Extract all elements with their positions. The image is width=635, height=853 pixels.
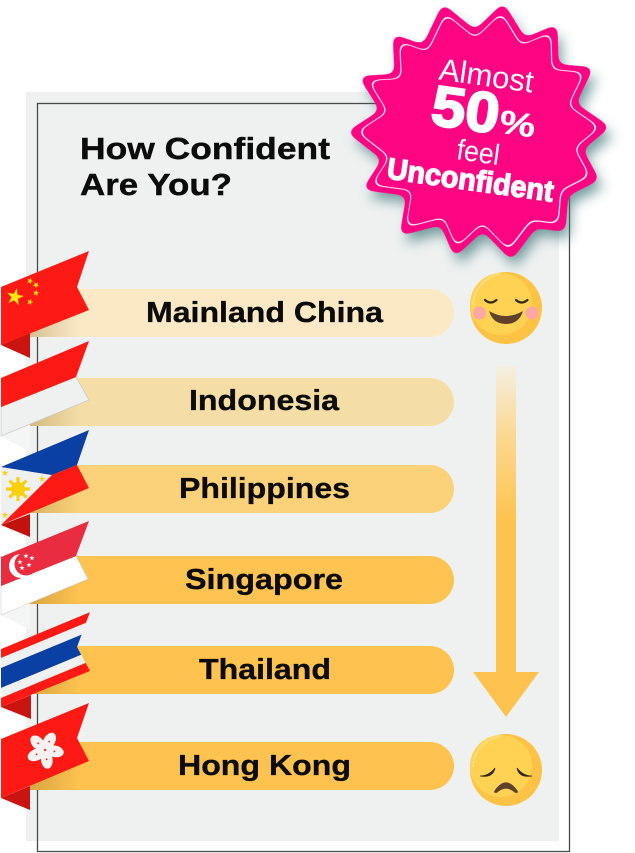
badge: almost 50% feel unconfident: 50	[428, 74, 504, 147]
icon: sad face	[470, 734, 542, 806]
bar: Indonesia: Indonesia	[189, 385, 340, 417]
bar: Philippines	[30, 465, 454, 513]
bar: Mainland China	[30, 289, 454, 337]
badge: almost 50% feel unconfident: feel	[455, 134, 502, 172]
flag ribbon: Hong Kong	[1, 703, 89, 810]
bar: Thailand	[30, 646, 454, 694]
bar: Philippines: Philippines	[179, 473, 350, 505]
flag ribbon: Thailand	[1, 612, 90, 719]
icon: happy face	[470, 272, 542, 344]
title: Are You?	[80, 167, 232, 202]
bar: Mainland China: Mainland China	[146, 297, 384, 329]
flag ribbon: China	[1, 251, 89, 358]
panel: grey background	[26, 92, 559, 841]
bar: Indonesia	[30, 378, 454, 426]
flag ribbon: Philippines	[1, 430, 89, 537]
title	[80, 131, 330, 202]
flag ribbon: Indonesia	[1, 341, 89, 452]
bar: Hong Kong	[30, 742, 454, 790]
bar: Singapore	[30, 556, 454, 604]
bar: Thailand: Thailand	[199, 654, 331, 686]
badge: almost 50% feel unconfident: Almost	[437, 52, 536, 100]
badge: almost 50% feel unconfident: %	[497, 103, 538, 144]
badge: almost 50% feel unconfident	[347, 3, 613, 267]
arrow: confidence falls	[473, 366, 539, 717]
panel: outline frame	[38, 104, 570, 852]
bar: Hong Kong: Hong Kong	[178, 750, 351, 782]
title: How Confident	[80, 131, 330, 166]
badge: almost 50% feel unconfident: Unconfident	[385, 153, 556, 209]
bar: Singapore: Singapore	[185, 564, 343, 596]
flag ribbon: Singapore	[1, 521, 89, 630]
